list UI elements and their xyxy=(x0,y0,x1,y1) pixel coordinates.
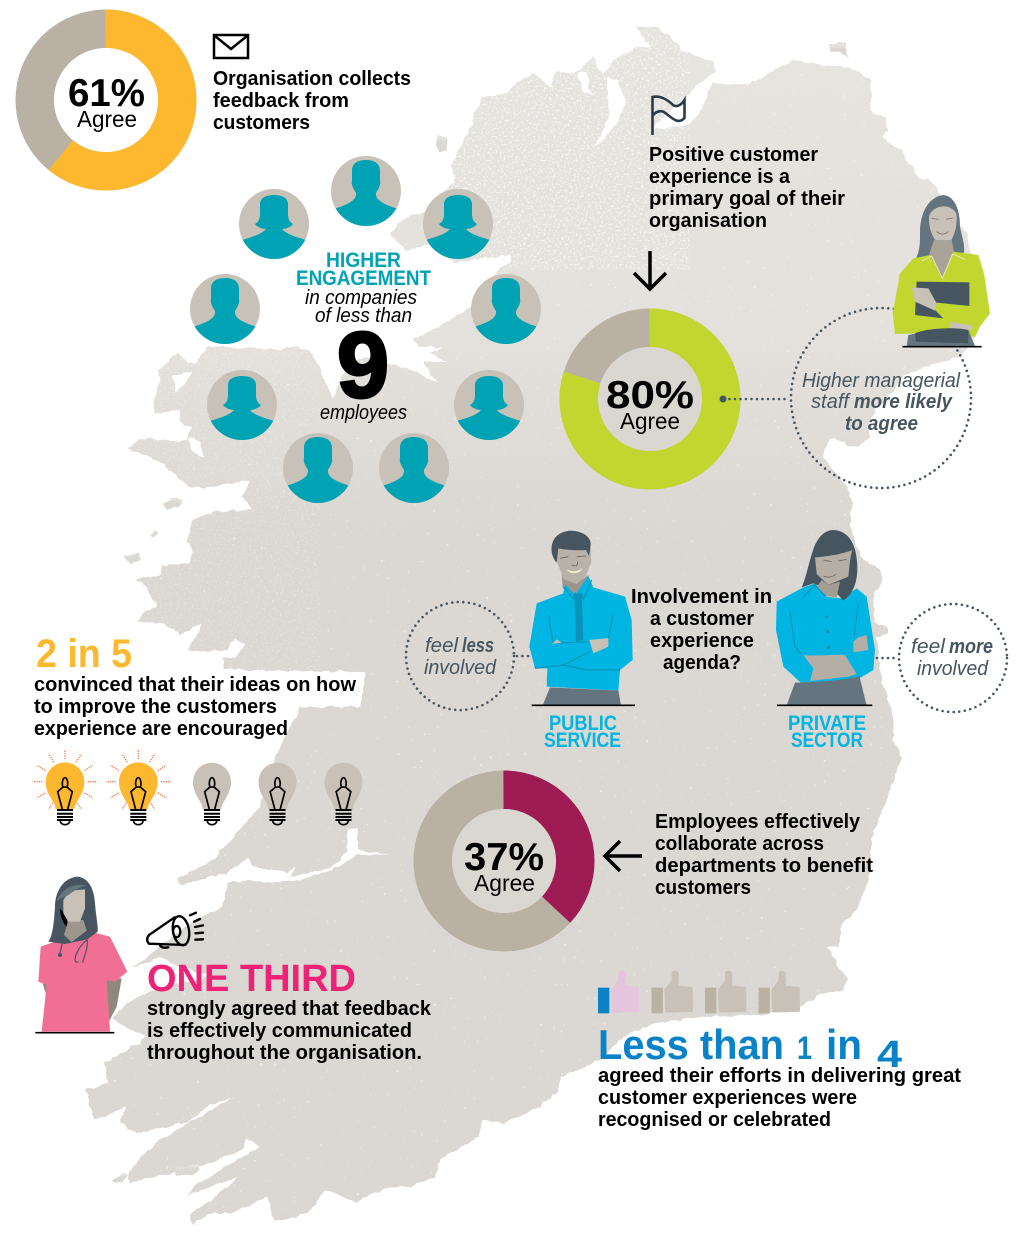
figure: public service man xyxy=(529,531,635,705)
icon: megaphone xyxy=(147,913,203,948)
callout: higher managerial staff: Higher managerial xyxy=(802,370,961,392)
arrow: down xyxy=(634,251,666,289)
callout: feel less involved: feel xyxy=(425,635,459,657)
icons: light bulbs xyxy=(33,749,362,825)
goal text: primary goal of their xyxy=(649,188,845,210)
question text: agenda? xyxy=(663,652,741,674)
donut chart 61% xyxy=(35,29,177,171)
callout: feel more involved: feel xyxy=(911,636,946,658)
label: public service: PUBLIC xyxy=(549,712,617,735)
callout: higher managerial staff: more likely xyxy=(854,391,953,413)
heading: less than 1 in 4 xyxy=(598,1021,902,1076)
donut chart 61%: Agree xyxy=(77,106,137,132)
recognition text: agreed their efforts in delivering great xyxy=(598,1065,961,1087)
collaboration text: departments to benefit xyxy=(655,855,873,877)
callout: higher managerial staff xyxy=(720,308,971,488)
heading: less than 1 in 4: in xyxy=(826,1021,862,1068)
feedback text: customers xyxy=(213,112,310,134)
heading: 2 in 5: 2 in 5 xyxy=(36,632,132,676)
collaboration text: Employees effectively xyxy=(655,811,861,833)
panel: 61% feedback xyxy=(35,29,411,171)
panel: 37% collaboration xyxy=(433,790,873,932)
heading: less than 1 in 4: 4 xyxy=(877,1034,902,1076)
figure: nurse xyxy=(35,877,127,1033)
callout: higher managerial staff: staff xyxy=(811,391,851,413)
donut chart 37%: 37% xyxy=(464,836,544,879)
engagement text: 9 xyxy=(337,313,389,417)
goal text: organisation xyxy=(649,210,767,232)
recognition text: recognised or celebrated xyxy=(598,1109,831,1131)
callout: feel more involved xyxy=(877,604,1007,712)
engagement text: employees xyxy=(320,402,407,424)
question text: a customer xyxy=(650,608,754,630)
goal text: Positive customer xyxy=(649,144,818,166)
label: private sector: PRIVATE xyxy=(788,712,866,735)
arrow: left xyxy=(605,841,642,871)
label: private sector xyxy=(788,712,866,752)
heading: less than 1 in 4: Less than xyxy=(598,1021,784,1068)
engagement text: of less than xyxy=(315,305,412,327)
panel: one third xyxy=(35,877,432,1064)
feedback text xyxy=(213,68,411,134)
figure: manager with folder xyxy=(893,195,990,347)
icon: flag xyxy=(652,97,684,135)
question text xyxy=(631,586,772,674)
panel: 80% positive customer experience xyxy=(579,97,990,488)
engagement text xyxy=(296,249,431,424)
label: private sector: SECTOR xyxy=(791,729,863,752)
label: public service: SERVICE xyxy=(544,729,621,752)
feedback text: Organisation collects xyxy=(213,68,411,90)
recognition text: customer experiences were xyxy=(598,1087,857,1109)
label: public service xyxy=(544,712,621,752)
donut chart 61%: 61% xyxy=(68,72,145,115)
engagement text: ENGAGEMENT xyxy=(296,267,431,290)
donut chart 80% xyxy=(579,328,721,470)
ideas text xyxy=(34,674,356,740)
heading: less than 1 in 4: 1 xyxy=(797,1030,812,1066)
panel: higher engagement xyxy=(190,156,541,504)
collaboration text: collaborate across xyxy=(655,833,824,855)
donut chart 80%: 80% xyxy=(606,374,694,417)
callout: higher managerial staff: to agree xyxy=(845,413,918,435)
ideas text: to improve the customers xyxy=(34,696,277,718)
feedback text: feedback from xyxy=(213,90,349,112)
recognition text xyxy=(598,1065,961,1131)
figure: private sector woman xyxy=(776,530,875,705)
callout: feel less involved: involved xyxy=(424,657,497,679)
feedback communicated text: is effectively communicated xyxy=(147,1020,412,1042)
ideas text: experience are encouraged xyxy=(34,718,288,740)
engagement text: HIGHER xyxy=(326,249,401,272)
people circles xyxy=(190,156,541,504)
panel: involvement in customer experience agenda xyxy=(406,530,1007,752)
icons: thumbs up xyxy=(598,972,799,1013)
heading: one third: ONE THIRD xyxy=(147,958,356,1000)
question text: Involvement in xyxy=(631,586,772,608)
callout: feel less involved xyxy=(406,602,531,710)
feedback communicated text xyxy=(147,998,432,1064)
feedback communicated text: strongly agreed that feedback xyxy=(147,998,432,1020)
collaboration text xyxy=(655,811,873,899)
callout: feel less involved: less xyxy=(462,635,494,657)
collaboration text: customers xyxy=(655,877,751,899)
callout: feel more involved: more xyxy=(949,636,993,658)
callout: feel more involved: involved xyxy=(917,658,989,680)
goal text xyxy=(649,144,845,232)
ideas text: convinced that their ideas on how xyxy=(34,674,356,696)
goal text: experience is a xyxy=(649,166,791,188)
donut chart 80%: Agree xyxy=(620,408,680,434)
question text: experience xyxy=(650,630,754,652)
donut chart 37% xyxy=(433,790,575,932)
panel: less than 1 in 4 xyxy=(598,972,961,1131)
panel: 2 in 5 ideas xyxy=(33,632,362,825)
engagement text: in companies xyxy=(305,287,417,309)
feedback communicated text: throughout the organisation. xyxy=(147,1042,422,1064)
icon: envelope xyxy=(214,35,248,58)
donut chart 37%: Agree xyxy=(474,870,535,896)
